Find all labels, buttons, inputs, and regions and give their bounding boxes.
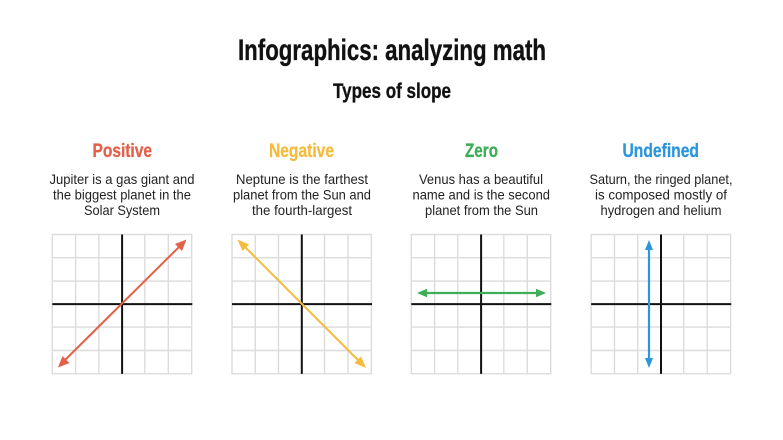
arrow: positive line (58, 240, 186, 368)
chart: negative slope (232, 234, 372, 374)
text: undefined description (590, 172, 732, 218)
text: undefined description: Saturn, the ringed planet, (590, 172, 732, 187)
text: positive description: Jupiter is a gas giant and (50, 172, 194, 187)
subtitle: Types of slope (333, 79, 451, 103)
arrow: zero line (417, 289, 546, 297)
text: negative description: the fourth-largest (252, 203, 352, 218)
heading: zero: Zero (465, 140, 498, 162)
heading: undefined: Undefined (622, 140, 699, 162)
text: negative description: planet from the Sun and (233, 188, 371, 202)
text: zero description: planet from the Sun (425, 203, 538, 218)
text: negative description: Neptune is the farthest (236, 172, 368, 187)
chart: undefined slope (591, 234, 731, 374)
text: undefined description: is composed mostly of (595, 188, 727, 202)
text: zero description (412, 172, 550, 218)
text: positive description: Solar System (84, 203, 160, 218)
panel: negative (232, 140, 372, 374)
panel: zero (411, 140, 551, 374)
text: positive description: the biggest planet in the (53, 188, 191, 202)
arrow: negative line (238, 240, 366, 368)
chart: zero slope (411, 234, 551, 374)
text: undefined description: hydrogen and helium (600, 203, 722, 218)
text: negative description (233, 172, 371, 218)
heading: negative: Negative (269, 140, 334, 162)
chart: positive slope (52, 234, 192, 374)
arrow: undefined line (645, 240, 653, 368)
text: zero description: name and is the second (412, 188, 550, 202)
heading: positive: Positive (92, 140, 152, 162)
panel: undefined (590, 140, 732, 374)
panel: positive (50, 140, 194, 374)
title: Infographics: analyzing math (238, 34, 546, 67)
text: zero description: Venus has a beautiful (419, 172, 543, 187)
text: positive description (50, 172, 194, 218)
